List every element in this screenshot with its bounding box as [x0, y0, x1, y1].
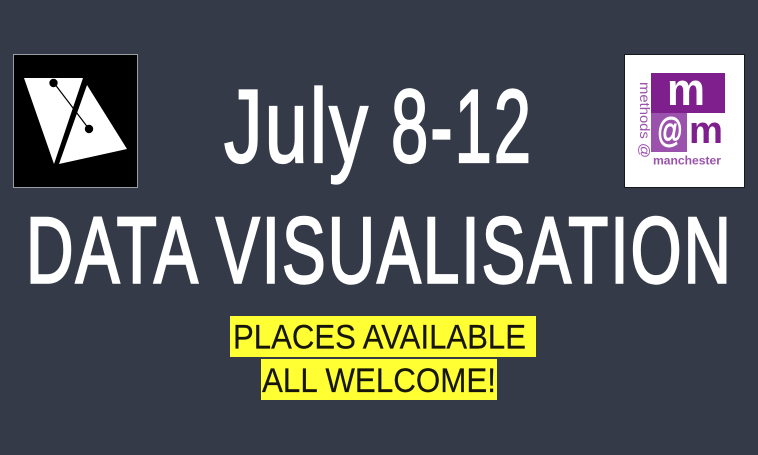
icon: methods@manchester logo: m [689, 110, 723, 152]
icon: methods@manchester logo: manchester [653, 156, 722, 168]
callout: all welcome: ALL WELCOME! [262, 362, 496, 400]
heading: dates [224, 69, 533, 185]
icon: methods@manchester logo [624, 54, 744, 188]
callout: places available: PLACES AVAILABLE [233, 318, 526, 356]
icon: data visualisation logo [14, 54, 138, 188]
icon: methods@manchester logo: methods @ [637, 82, 652, 158]
title: DATA [26, 198, 200, 302]
heading: dates: 8-12 [391, 69, 533, 185]
icon: methods@manchester logo: @ [657, 112, 683, 150]
icon: methods@manchester logo: m [667, 64, 705, 115]
heading: dates: July [224, 69, 370, 185]
